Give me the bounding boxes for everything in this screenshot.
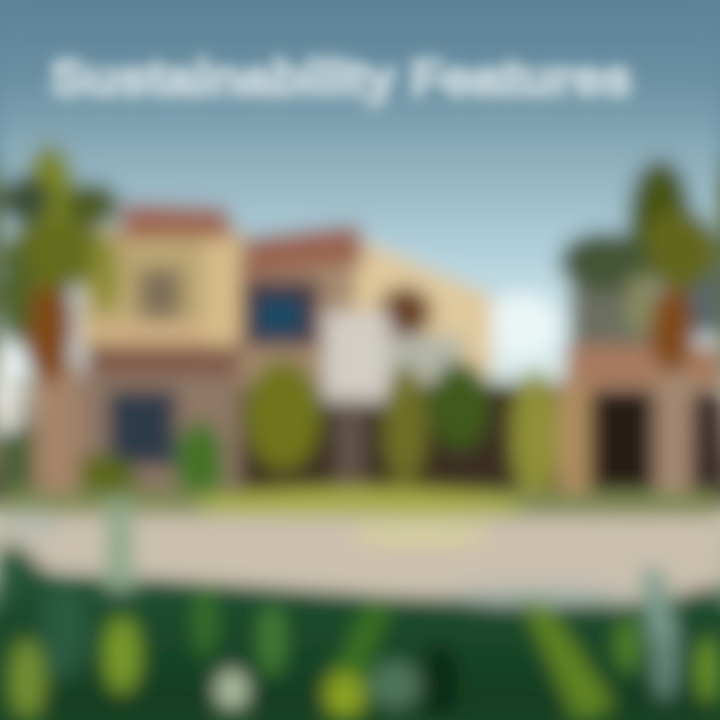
right palm: [559, 160, 720, 508]
fronds: [22, 145, 78, 285]
trunk: [658, 360, 690, 508]
foreground foliage: [0, 500, 720, 720]
lawn strip: [0, 492, 720, 516]
dark teal leaf: [41, 580, 89, 680]
road left grey patch: [0, 511, 60, 539]
bushes: [64, 359, 559, 509]
left wing lower bright patch: [80, 320, 240, 348]
door: [108, 390, 176, 466]
left edge greenery: [0, 430, 40, 510]
white gap at left edge: [0, 345, 14, 435]
centre window frame: [243, 280, 319, 346]
leaf highlights: [9, 500, 720, 720]
fronds: [628, 160, 692, 284]
light column: [324, 312, 463, 490]
left wing bright patch: [87, 257, 123, 313]
road far lower bluish edge: [450, 585, 630, 605]
pale vertical stalk: [105, 500, 135, 590]
road yellow patch: [350, 523, 490, 547]
dark background behind the bushes: [230, 385, 570, 500]
road: [0, 514, 720, 604]
trunk: [34, 360, 80, 495]
centre window glass: [255, 295, 305, 337]
left wing wall: [80, 228, 242, 353]
left ground band: [85, 345, 240, 375]
left roof: [118, 203, 232, 238]
left palm: [0, 145, 120, 495]
villa: [75, 203, 492, 490]
right wing wall: [350, 238, 492, 378]
pilaster: [205, 240, 239, 390]
left wing window: [138, 268, 182, 320]
bright horizon glow: [484, 293, 560, 357]
right building: [558, 265, 720, 507]
centre roof: [240, 224, 366, 275]
sky: [0, 0, 720, 380]
centre wall: [232, 258, 362, 388]
arched window: [378, 287, 432, 337]
lower left wall: [75, 375, 240, 490]
title: Sustainability Features: [50, 50, 632, 106]
